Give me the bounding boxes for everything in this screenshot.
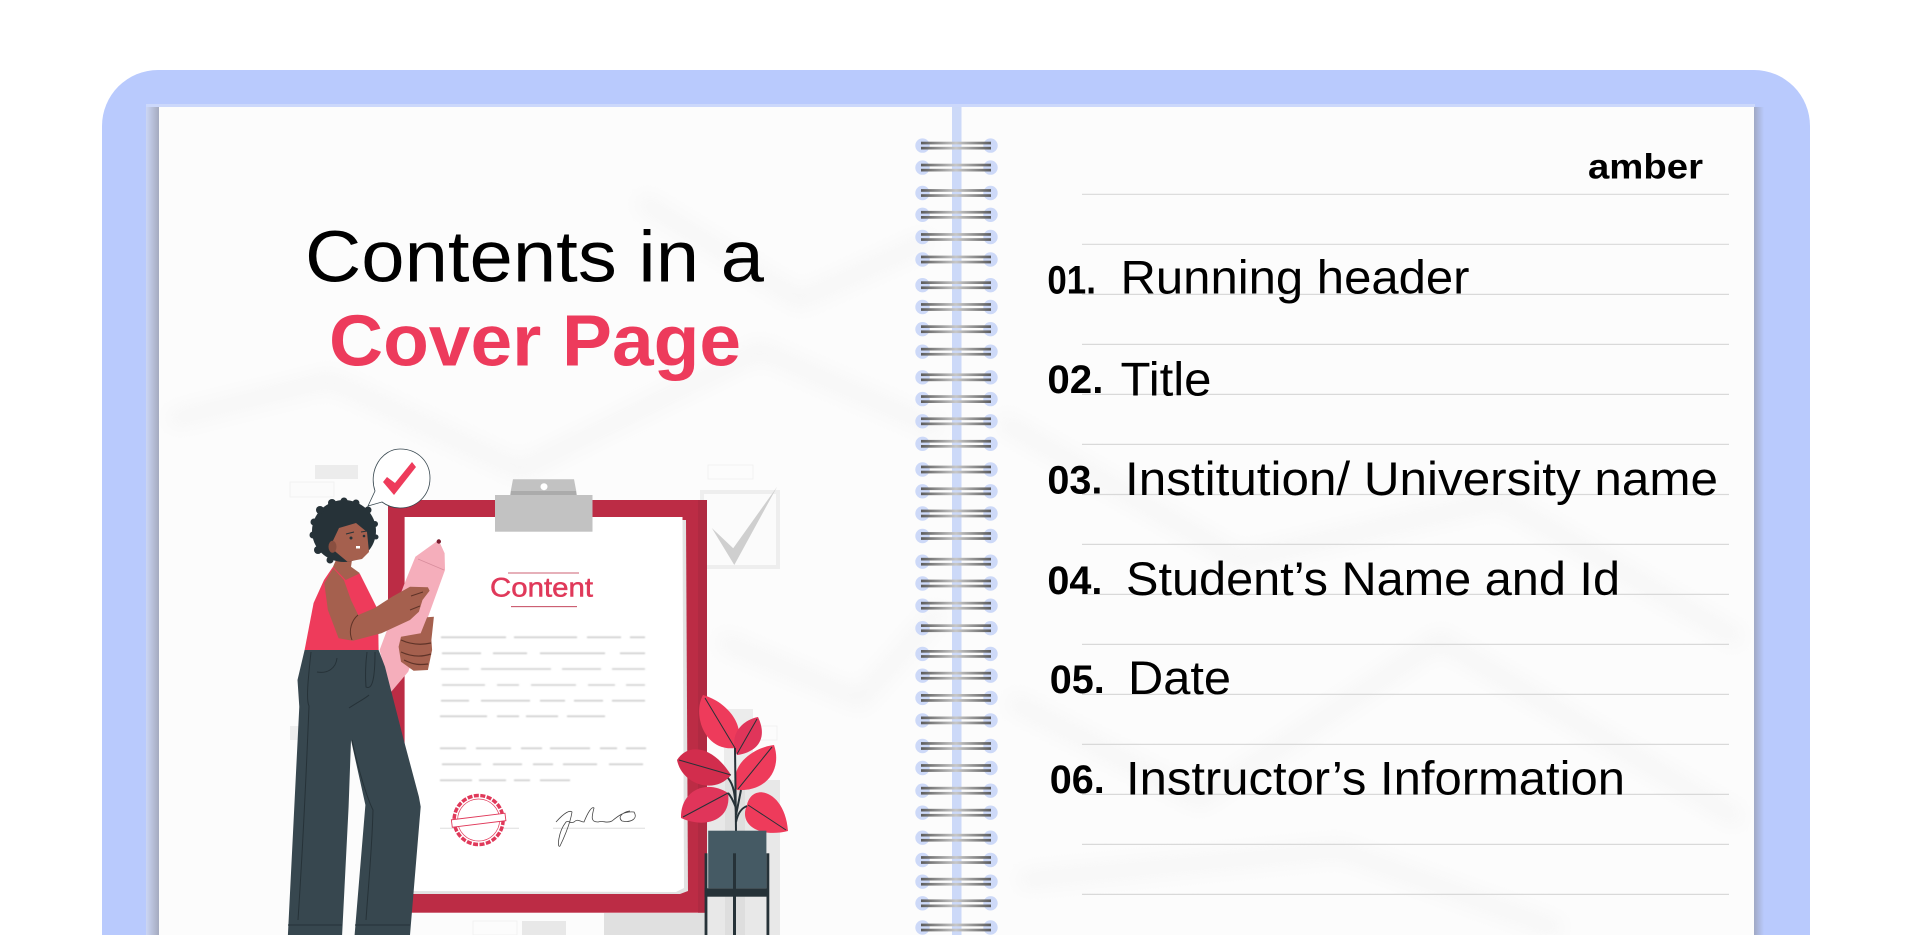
- item 03: Institution/ University name: [1125, 452, 1718, 505]
- item 04: Student’s Name and Id: [1126, 552, 1620, 605]
- person: trousers: [288, 650, 421, 935]
- plant pot: [708, 831, 766, 888]
- item 06: Instructor’s Information: [1126, 752, 1625, 804]
- person: hair: [310, 498, 378, 564]
- background decorative shapes: [290, 465, 780, 935]
- panel: notebook pages: [146, 104, 1764, 935]
- stamp: [451, 796, 506, 844]
- item 02: Title: [1120, 352, 1212, 406]
- leaf veins: [679, 698, 786, 830]
- spiral binding: [915, 138, 998, 935]
- clipboard paper: [405, 517, 688, 894]
- grey check mark: [712, 487, 777, 565]
- person: second hand: [399, 617, 434, 671]
- title: [305, 218, 765, 382]
- title: Contents in a: [305, 218, 765, 298]
- clipboard board: [388, 500, 707, 913]
- item 02: [1047, 352, 1212, 406]
- item 05: Date: [1128, 651, 1231, 704]
- leaves: [677, 695, 788, 833]
- contents list: [1047, 250, 1718, 804]
- brand logo: amber: amber: [1588, 147, 1703, 186]
- plant stand: [705, 853, 769, 935]
- signature lines: [440, 828, 645, 829]
- document heading: Content: Content: [490, 573, 594, 603]
- signature: [556, 808, 635, 846]
- item 01: 01.: [1047, 258, 1096, 302]
- person: face: [328, 523, 369, 562]
- person: top: [305, 567, 379, 650]
- pencil: [380, 539, 445, 693]
- item 04: 04.: [1047, 559, 1102, 603]
- item 01: Running header: [1120, 250, 1470, 303]
- speech bubble with check: [368, 449, 430, 508]
- person: arm and hand: [324, 568, 430, 641]
- item 05: 05.: [1050, 658, 1105, 702]
- ruled lines: [1082, 194, 1729, 894]
- title: Cover Page: [329, 302, 741, 382]
- item 05: [1050, 651, 1231, 704]
- clipboard clip: [495, 479, 592, 532]
- person: neck: [333, 560, 360, 580]
- plant: [677, 695, 788, 935]
- item 02: 02.: [1047, 358, 1103, 402]
- document text lines: [440, 637, 646, 780]
- illustration: person with clipboard: [288, 449, 788, 935]
- item 03: 03.: [1047, 458, 1102, 502]
- plant stem: [728, 748, 747, 831]
- item 06: 06.: [1050, 758, 1105, 802]
